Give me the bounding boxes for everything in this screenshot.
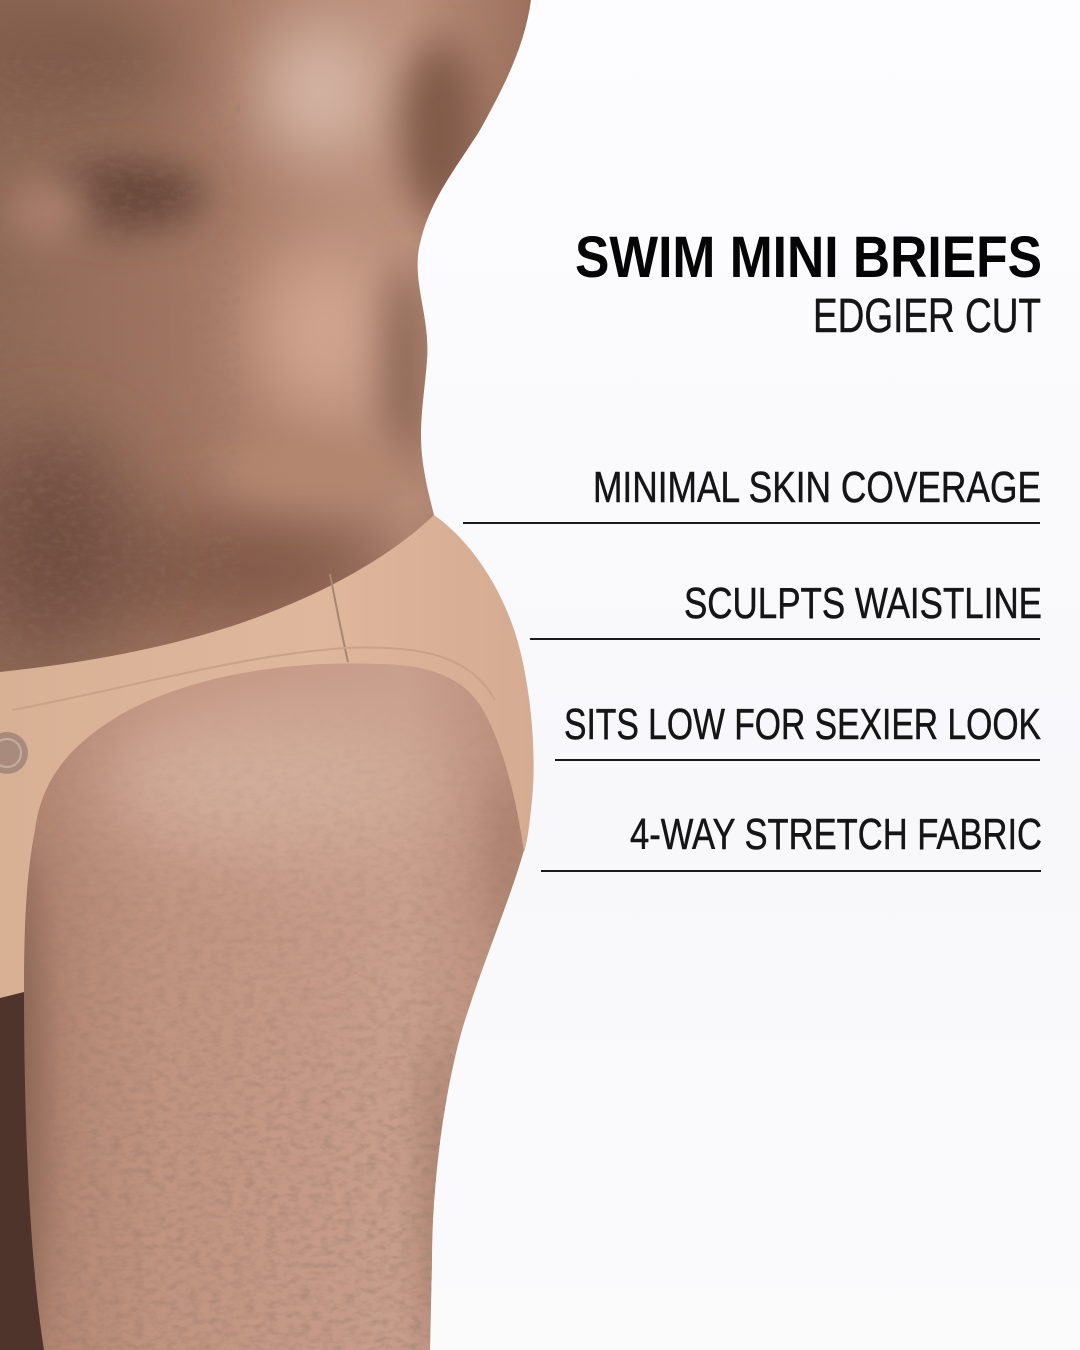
dark inner thigh shadow [0, 990, 44, 1350]
leg opening stitching [12, 648, 495, 710]
torso skin [0, 0, 531, 672]
photo: model torso and thigh in nude swim briefs [0, 0, 540, 1350]
logo button [0, 732, 28, 774]
thigh skin [0, 630, 540, 1350]
briefs [0, 515, 534, 998]
waistband seam [330, 574, 348, 662]
